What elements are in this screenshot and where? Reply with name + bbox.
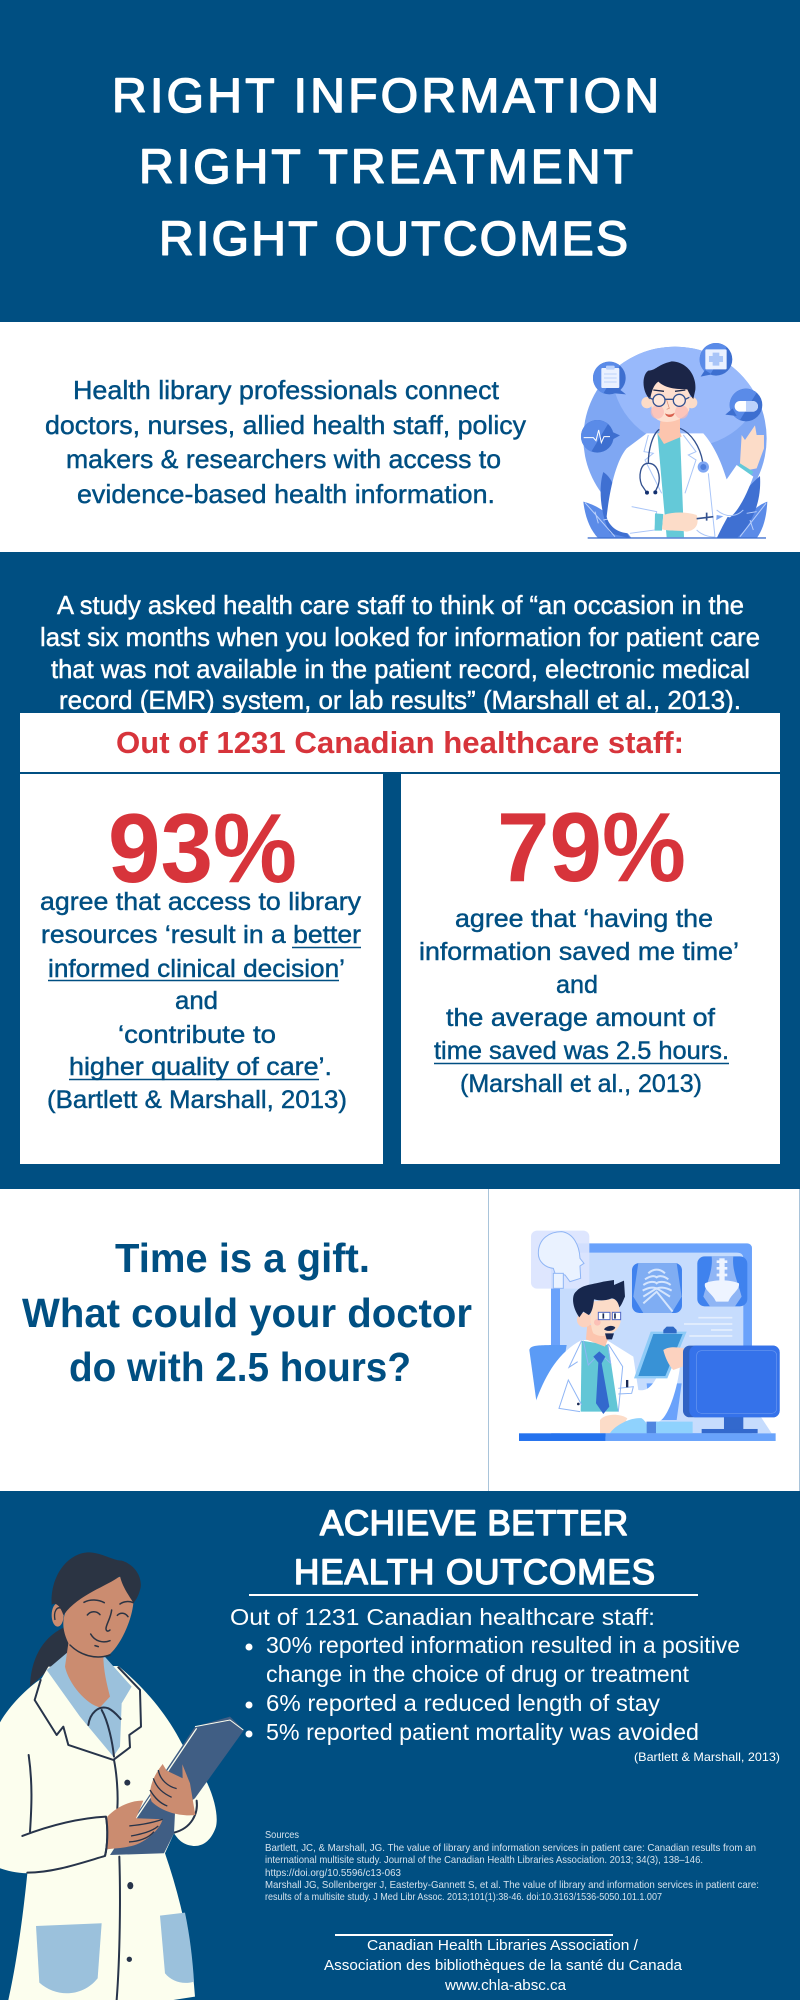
- neck: [65, 1643, 110, 1707]
- text block: 93 percent description: ‘contribute to: [118, 1021, 276, 1049]
- heading: time is a gift question: [22, 1235, 472, 1390]
- panel: introduction: [0, 322, 800, 552]
- text block: study question: record (EMR) system, or lab results” (Marshall et al., 2013).: [59, 685, 741, 715]
- text block: sources: international multisite study. Journal of the Canadian Health Libraries Association. 2013; 34(3), 138–146.: [265, 1854, 703, 1866]
- text block: 93 percent description: (Bartlett & Marshall, 2013): [47, 1086, 347, 1114]
- panel: 93 percent card: [20, 774, 383, 1164]
- facial features: [70, 1600, 133, 1657]
- text block: 79 percent description: [419, 905, 739, 1098]
- book: [110, 1717, 244, 1855]
- monitor stand and arm: [647, 1383, 682, 1420]
- text block: sources: Marshall JG, Sollenberger J, Easterby-Gannett S, et al. The value of library and information services in patient care:: [265, 1879, 759, 1891]
- text block: association footer: Association des bibliothèques de la santé du Canada: [324, 1957, 683, 1974]
- text block: 93 percent description: informed clinical decision’: [48, 955, 345, 983]
- text block: 93 percent description: and: [175, 987, 218, 1015]
- hair: [644, 361, 695, 399]
- bubbles: [593, 362, 626, 394]
- heading: achieve better health outcomes: ACHIEVE BETTER: [320, 1504, 628, 1543]
- glasses: [648, 394, 689, 406]
- leaves: [583, 502, 632, 538]
- hand and keyboard: [600, 1415, 627, 1433]
- heading: achieve better health outcomes: [249, 1504, 698, 1596]
- title: RIGHT TREATMENT: [139, 141, 633, 194]
- panel: staff heading: [20, 713, 780, 772]
- icon: radiology doctor illustration: [519, 1231, 780, 1441]
- text block: 79 percent description: time saved was 2.5 hours.: [434, 1037, 729, 1065]
- coat: [523, 1340, 680, 1433]
- pockets: [36, 1923, 102, 1993]
- text block: outcomes list: 30% reported information resulted in a positive: [266, 1632, 740, 1658]
- text block: sources: results of a multisite study. J Med Libr Assoc. 2013;101(1):38-46. doi:10.3163/1536-5050.101.1.007: [265, 1891, 662, 1903]
- ponytail: [30, 1628, 75, 1687]
- text block: study question: that was not available in the patient record, electronic medical: [51, 654, 750, 684]
- text block: 79 percent description: the average amount of: [446, 1004, 715, 1032]
- title: RIGHT OUTCOMES: [159, 213, 628, 266]
- stethoscope: [640, 428, 703, 492]
- ear: [52, 1603, 64, 1627]
- text block: introduction: doctors, nurses, allied health staff, policy: [45, 410, 526, 440]
- text block: study question: [40, 590, 760, 715]
- text block: 93 percent description: higher quality of care’.: [69, 1053, 332, 1081]
- head: [586, 1323, 611, 1347]
- text block: outcomes list: Out of 1231 Canadian healthcare staff:: [230, 1604, 655, 1630]
- text block: association footer: www.chla-absc.ca: [444, 1977, 567, 1994]
- face: [63, 1577, 133, 1656]
- heading: out of 1231: Out of 1231 Canadian healthcare staff:: [116, 725, 684, 760]
- text block: outcomes list: 5% reported patient mortality was avoided: [266, 1719, 699, 1745]
- heading: time is a gift question: Time is a gift.: [115, 1235, 370, 1281]
- text block: introduction: Health library professionals connect: [73, 375, 500, 405]
- heading: time is a gift question: do with 2.5 hours?: [69, 1344, 411, 1390]
- upper hand: [150, 1764, 195, 1815]
- text block: association footer: Canadian Health Libraries Association /: [367, 1937, 639, 1954]
- title: [112, 70, 659, 266]
- panel: title banner: [0, 0, 800, 322]
- monitor: [702, 1429, 758, 1433]
- text block: 79 percent description: agree that ‘having the: [455, 905, 713, 933]
- stat: 93%: 93%: [108, 793, 297, 903]
- heading: achieve better health outcomes: HEALTH OUTCOMES: [294, 1553, 655, 1592]
- xray 1: [632, 1263, 682, 1313]
- text block: association footer: [324, 1934, 683, 1994]
- text block: 79 percent description: (Marshall et al., 2013): [460, 1070, 702, 1098]
- stat: 79%: 79%: [497, 792, 686, 902]
- title: RIGHT INFORMATION: [112, 70, 659, 123]
- text block: 93 percent description: [40, 888, 362, 1114]
- wall screen: [551, 1243, 752, 1437]
- chair: [529, 1345, 567, 1403]
- hair: [52, 1552, 141, 1615]
- text block: sources: https://doi.org/10.5596/c13-063: [265, 1867, 401, 1879]
- text block: sources: Bartlett, JC, & Marshall, JG. The value of library and information services in patient care: Canadian results from an: [265, 1842, 756, 1854]
- panel: 79 percent card: [401, 774, 780, 1164]
- text block: study question: A study asked health care staff to think of “an occasion in the: [57, 590, 744, 620]
- text block: introduction: [45, 375, 526, 509]
- text block: outcomes list: [230, 1604, 740, 1745]
- text block: outcomes list: 6% reported a reduced length of stay: [266, 1690, 660, 1716]
- text block: study question: last six months when you looked for information for patient care: [40, 622, 760, 652]
- coat outlines: [22, 1667, 197, 2000]
- panel: study section: [0, 552, 800, 1190]
- panel: time is a gift: [0, 1189, 800, 1491]
- xray 2: [697, 1256, 747, 1306]
- text block: sources: [265, 1829, 759, 1903]
- skull: [531, 1231, 589, 1289]
- text block: 93 percent description: agree that access to library: [40, 888, 362, 916]
- text block: 79 percent description: information saved me time’: [419, 938, 739, 966]
- lower hand: [107, 1801, 163, 1849]
- clipboard: [634, 1332, 687, 1378]
- text block: sources: Sources: [265, 1829, 299, 1841]
- face: [659, 417, 680, 440]
- panel: achieve better health outcomes: [0, 1491, 800, 2000]
- text block: 79 percent description: and: [556, 971, 598, 999]
- text block: outcomes list: change in the choice of drug or treatment: [266, 1661, 689, 1687]
- text block: introduction: makers & researchers with access to: [66, 444, 501, 474]
- text block: outcomes citation: (Bartlett & Marshall, 2013): [634, 1750, 780, 1764]
- coat: [0, 1666, 217, 2000]
- icon: waving doctor illustration: [581, 343, 768, 539]
- text block: introduction: evidence-based health information.: [77, 479, 495, 509]
- arm and hand: [740, 425, 764, 470]
- desk: [519, 1433, 606, 1441]
- icon: woman doctor holding book: [0, 1552, 244, 2000]
- shirt: [47, 1652, 132, 1757]
- coat: [607, 433, 753, 537]
- text block: 93 percent description: resources ‘result in a better: [41, 921, 361, 949]
- heading: time is a gift question: What could your doctor: [22, 1290, 472, 1336]
